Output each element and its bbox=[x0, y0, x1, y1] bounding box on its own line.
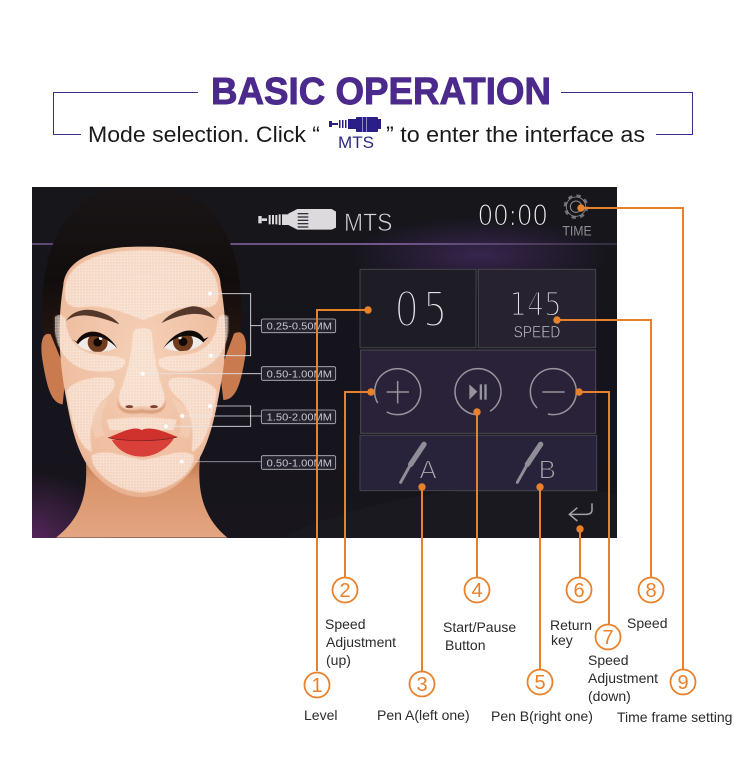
numbered markers: 9 bbox=[677, 672, 689, 694]
callout labels: Time frame setting bbox=[617, 709, 732, 725]
time label: TIME bbox=[562, 223, 592, 239]
callout labels: Button bbox=[445, 637, 485, 653]
callout labels: key bbox=[551, 632, 573, 648]
clock: 00:00 bbox=[478, 200, 548, 233]
numbered markers bbox=[304, 578, 696, 698]
icon: time setting gear bbox=[565, 196, 587, 218]
icon: return key bbox=[569, 503, 592, 521]
callout labels: Start/Pause bbox=[443, 619, 516, 635]
callout labels: Adjustment bbox=[326, 634, 396, 650]
numbered markers: 3 bbox=[416, 674, 428, 696]
panel: level bbox=[360, 269, 476, 348]
depth markers bbox=[141, 292, 213, 464]
numbered markers: 4 bbox=[471, 580, 483, 602]
panel: pens bbox=[360, 435, 597, 491]
icon: MTS pen: MTS bbox=[338, 133, 374, 152]
callout labels: Pen A(left one) bbox=[377, 707, 470, 723]
face shape bbox=[60, 247, 225, 497]
panel: speed: 145 bbox=[509, 286, 561, 324]
lips bbox=[108, 428, 177, 457]
panel: speed: SPEED bbox=[514, 323, 560, 342]
subtitle: Mode selection. Click “ bbox=[88, 122, 320, 147]
depth labels: 0.50-1.00MM bbox=[267, 458, 332, 469]
callout labels: (up) bbox=[326, 652, 351, 668]
mode label: MTS bbox=[344, 209, 392, 237]
callout labels: (down) bbox=[588, 688, 631, 704]
icon: MTS handpiece bbox=[258, 209, 336, 230]
hair bbox=[42, 222, 241, 356]
subtitle bbox=[88, 122, 645, 147]
orange callout lines bbox=[317, 208, 683, 671]
depth labels: 1.50-2.00MM bbox=[267, 413, 332, 424]
panel: device screen bbox=[32, 185, 617, 538]
callout labels: Pen B(right one) bbox=[491, 708, 593, 724]
panel: controls bbox=[344, 196, 597, 521]
panel: pens: A bbox=[419, 454, 437, 484]
depth callout lines bbox=[143, 294, 261, 462]
infographic canvas bbox=[32, 77, 732, 725]
eyebrows bbox=[66, 306, 215, 324]
callout labels: Adjustment bbox=[588, 670, 658, 686]
icon: MTS pen bbox=[329, 117, 381, 152]
numbered markers: 5 bbox=[534, 672, 546, 694]
depth labels bbox=[261, 319, 336, 469]
numbered markers: 6 bbox=[573, 580, 585, 602]
callout labels: Speed bbox=[627, 615, 667, 631]
callout labels: Level bbox=[304, 707, 337, 723]
numbered markers: 8 bbox=[645, 580, 657, 602]
subtitle: ” to enter the interface as bbox=[386, 122, 645, 147]
neck bbox=[56, 448, 227, 538]
title frame bbox=[54, 92, 692, 134]
face illustration bbox=[41, 185, 336, 538]
numbered markers: 7 bbox=[602, 627, 614, 649]
panel: level: 05 bbox=[395, 282, 451, 339]
callout labels: Speed bbox=[325, 616, 365, 632]
title: BASIC OPERATION bbox=[211, 71, 551, 113]
callout dots bbox=[364, 204, 585, 533]
callout labels bbox=[304, 615, 732, 725]
ears bbox=[41, 332, 246, 404]
numbered markers: 1 bbox=[311, 675, 323, 697]
eyes bbox=[71, 331, 209, 352]
depth labels: 0.50-1.00MM bbox=[267, 369, 332, 380]
nose shading bbox=[117, 398, 166, 414]
callout labels: Return bbox=[550, 617, 592, 633]
depth labels: 0.25-0.50MM bbox=[267, 322, 332, 333]
panel: speed bbox=[478, 269, 596, 348]
callout labels: Speed bbox=[588, 652, 628, 668]
treatment zones bbox=[55, 250, 228, 492]
panel: pens: B bbox=[539, 454, 556, 484]
numbered markers: 2 bbox=[339, 580, 351, 602]
panel: adjustment buttons bbox=[361, 350, 596, 433]
